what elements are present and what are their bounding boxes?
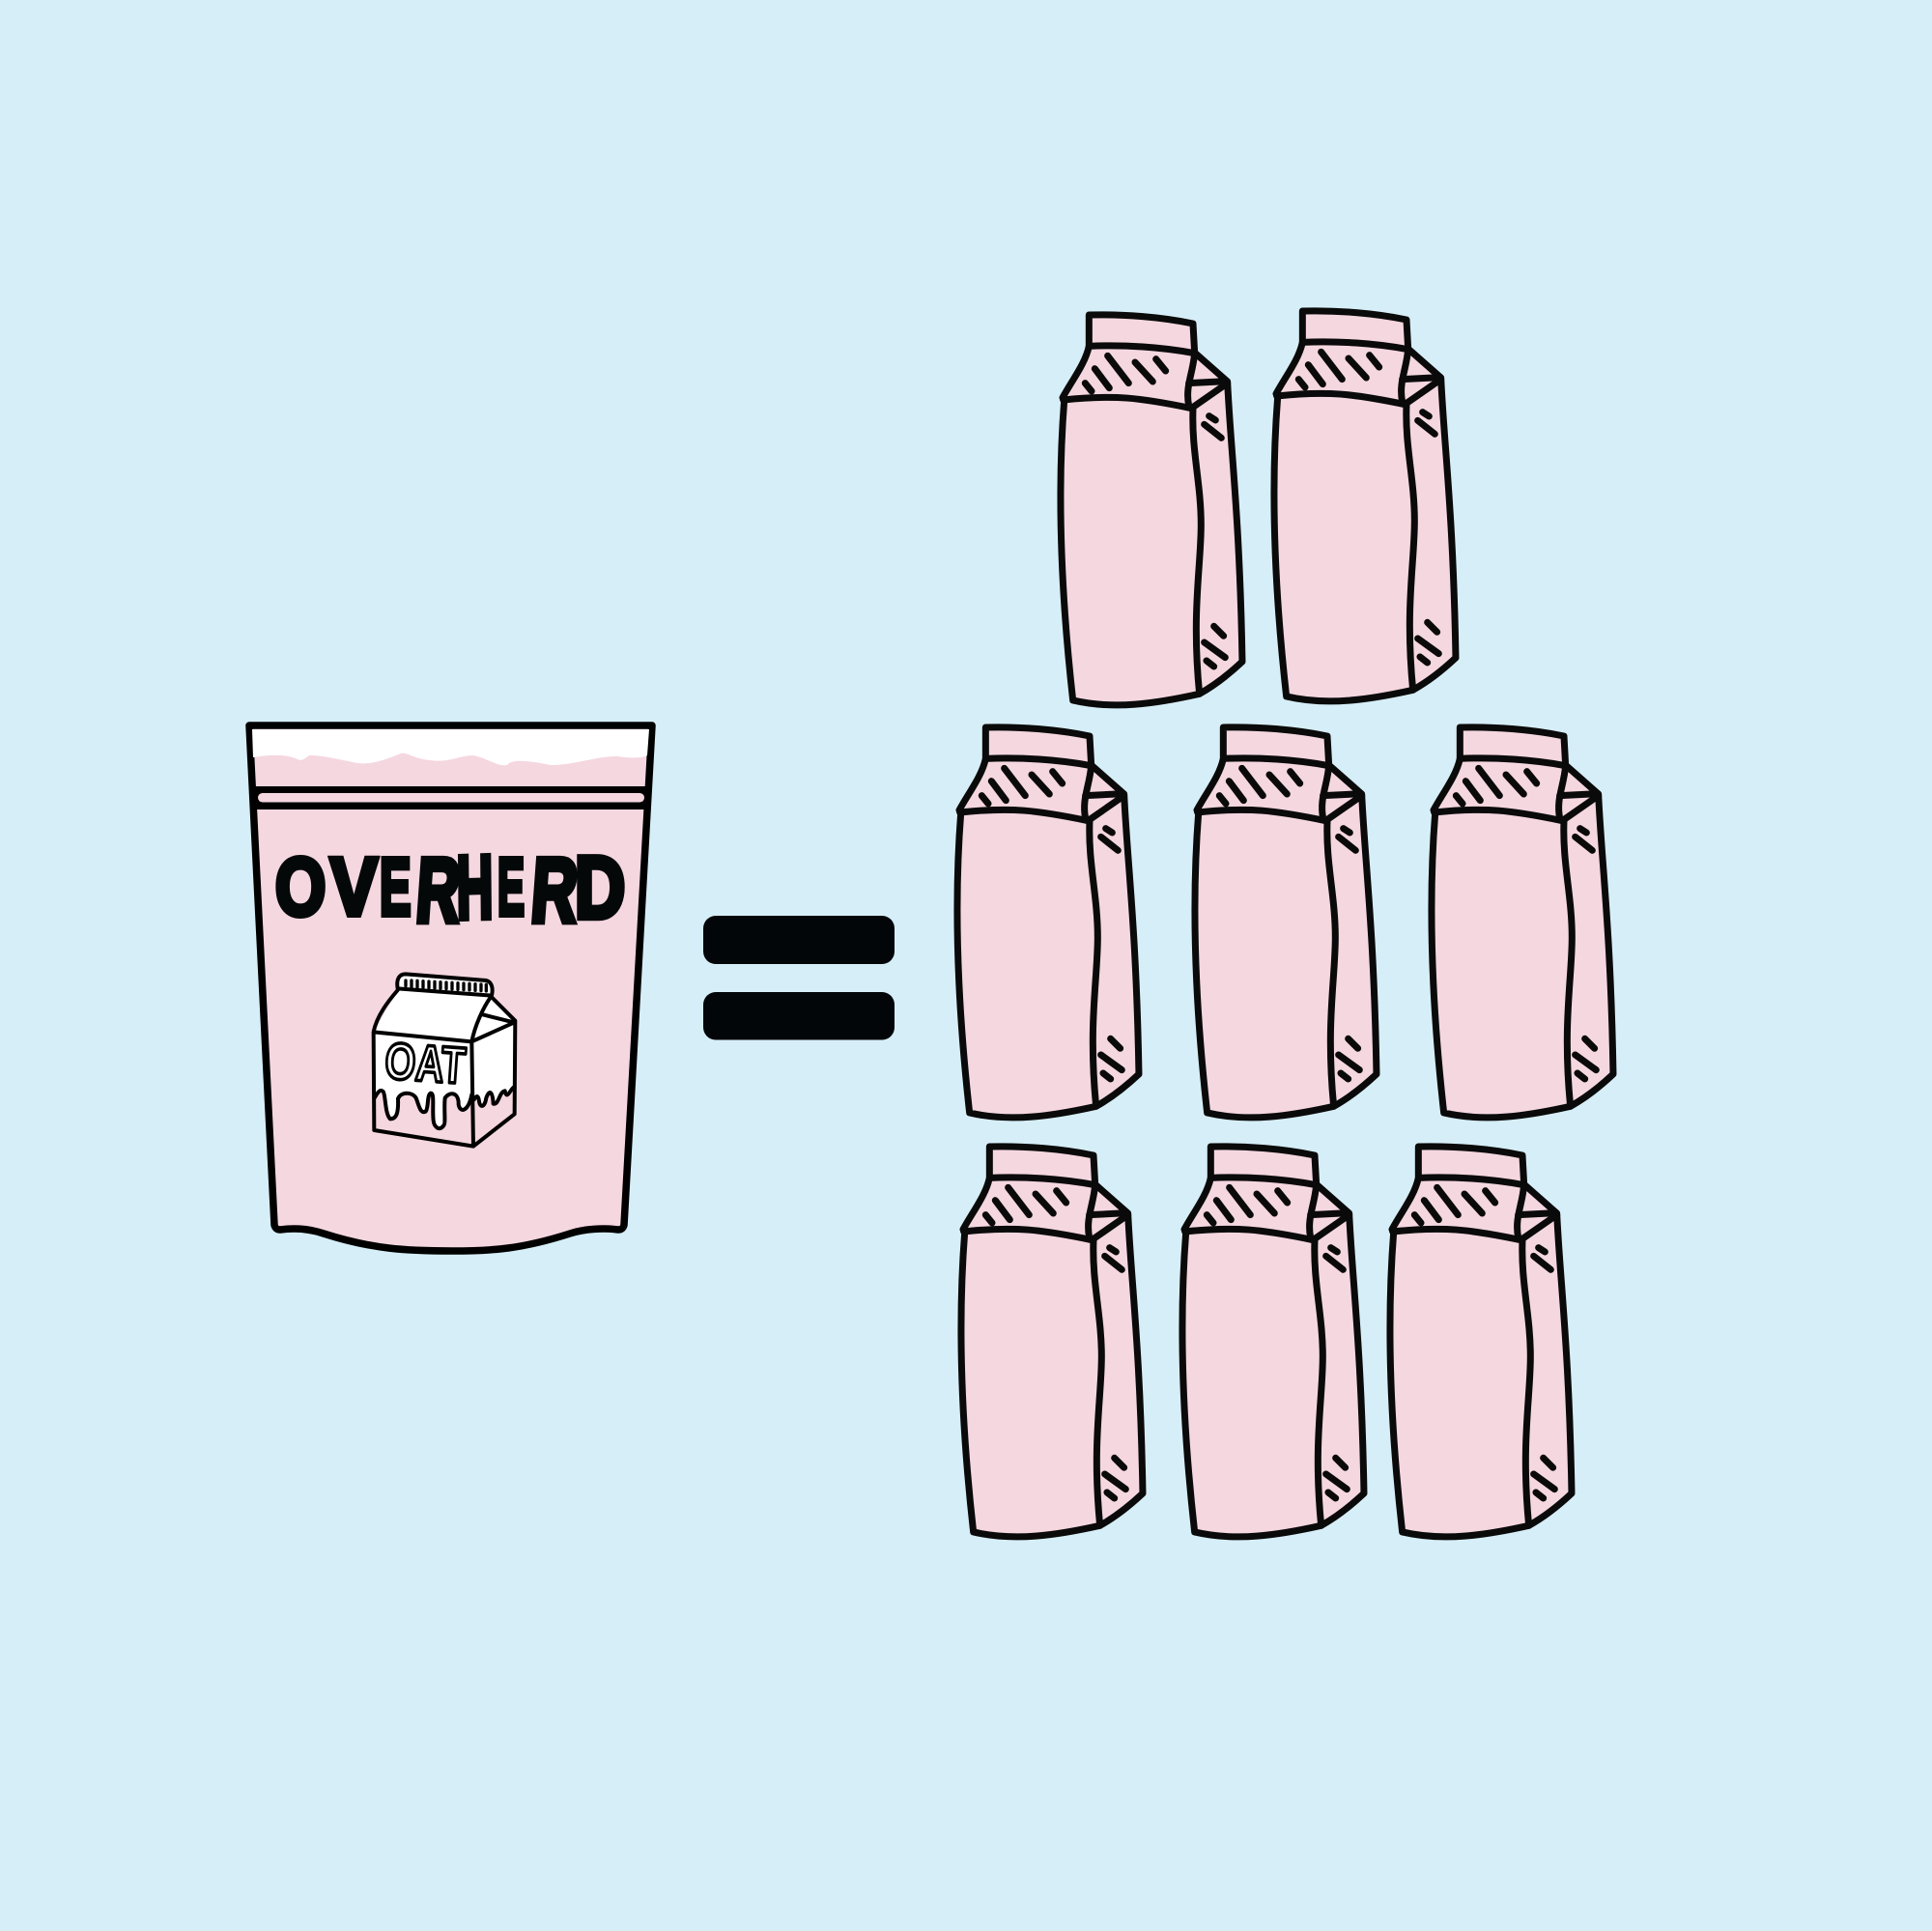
carton outline <box>374 990 515 1147</box>
pouch body <box>249 725 652 1251</box>
carton 1 <box>1061 315 1242 705</box>
carton OAT label: OAT <box>383 1033 468 1095</box>
carton 6 <box>961 1147 1143 1537</box>
pouch brand name: O <box>275 841 326 932</box>
pouch brand name: R <box>528 839 582 941</box>
pouch brand name: H <box>456 837 494 938</box>
equals sign <box>703 916 895 1039</box>
carton 3 <box>957 727 1139 1118</box>
pouch <box>249 725 652 1251</box>
carton white faces <box>374 990 515 1128</box>
pouch brand name: D <box>575 838 625 936</box>
carton 2 <box>1274 311 1456 701</box>
pouch top white band with wavy edge <box>252 729 649 765</box>
carton drips <box>375 1091 471 1128</box>
carton 5 <box>1432 727 1613 1118</box>
carton cap <box>397 974 493 996</box>
small oat milk carton on pouch <box>374 974 515 1147</box>
pouch brand name: E <box>380 841 411 932</box>
carton 4 <box>1195 727 1377 1118</box>
pouch brand name <box>275 837 625 941</box>
carton 8 <box>1390 1147 1572 1537</box>
pouch brand name: R <box>413 839 464 941</box>
carton 7 <box>1182 1147 1364 1537</box>
pouch zip seal <box>252 786 649 809</box>
pouch brand name: V <box>330 841 378 932</box>
pouch brand name: E <box>497 841 525 932</box>
